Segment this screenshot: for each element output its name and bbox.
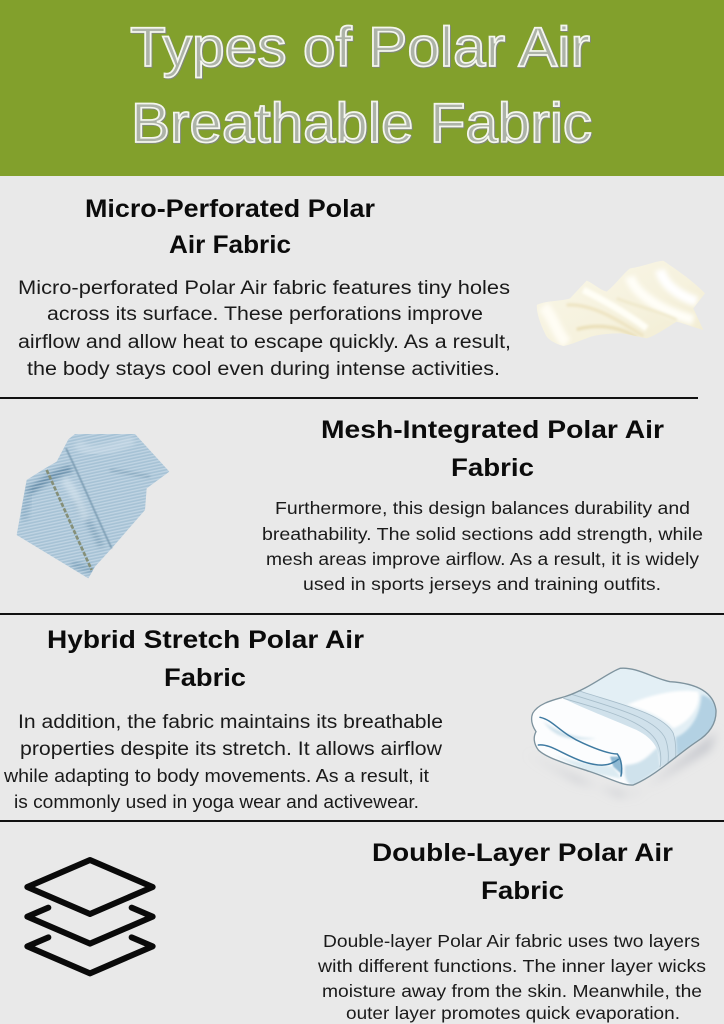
text block: double-layer: outer layer promotes quick evaporation.: [346, 1003, 680, 1023]
text block: hybrid stretch: is commonly used in yoga wear and activewear.: [14, 791, 419, 812]
panel: double-layer fabric: [27, 839, 706, 1023]
text block: hybrid stretch: while adapting to body movements. As a result, it: [3, 765, 429, 786]
text block: hybrid stretch: properties despite its stretch. It allows airflow: [20, 739, 442, 760]
text block: micro-perforated: the body stays cool even during intense activities.: [27, 359, 500, 380]
text block: mesh-integrated: mesh areas improve airflow. As a result, it is widely: [266, 549, 699, 569]
text block: micro-perforated: [18, 278, 511, 380]
header banner: [0, 0, 724, 176]
icon: stacked layers: [27, 860, 153, 973]
text block: mesh-integrated: used in sports jerseys and training outfits.: [303, 574, 661, 594]
heading: micro-perforated: Micro-Perforated Polar: [85, 195, 375, 223]
heading: mesh-integrated: Fabric: [451, 454, 534, 482]
text block: mesh-integrated: Furthermore, this design balances durability and: [275, 498, 690, 518]
divider 1: [0, 397, 698, 399]
heading: hybrid stretch: [47, 626, 364, 692]
icon: denim fabric swatch: [13, 430, 173, 580]
heading: mesh-integrated: [321, 416, 664, 482]
heading: micro-perforated: [85, 195, 375, 259]
text block: micro-perforated: airflow and allow heat to escape quickly. As a result,: [18, 332, 511, 353]
title: Breathable Fabric: [131, 91, 592, 154]
heading: double-layer: Fabric: [481, 877, 564, 905]
text block: micro-perforated: Micro-perforated Polar Air fabric features tiny holes: [18, 278, 510, 299]
text block: hybrid stretch: In addition, the fabric maintains its breathable: [18, 712, 443, 733]
title: Types of Polar Air: [130, 15, 590, 78]
heading: mesh-integrated: Mesh-Integrated Polar Air: [321, 416, 664, 444]
heading: micro-perforated: Air Fabric: [169, 231, 291, 259]
divider 2: [0, 613, 724, 615]
text block: mesh-integrated: [262, 498, 703, 594]
heading: hybrid stretch: Hybrid Stretch Polar Air: [47, 626, 364, 654]
icon: folded towel: [527, 663, 720, 797]
heading: double-layer: Double-Layer Polar Air: [372, 839, 673, 867]
panel: mesh-integrated fabric: [13, 416, 703, 594]
text block: double-layer: moisture away from the skin. Meanwhile, the: [322, 981, 702, 1001]
text block: mesh-integrated: breathability. The solid sections add strength, while: [262, 524, 703, 544]
icon: crumpled cream fabric: [537, 261, 705, 346]
text block: hybrid stretch: [3, 712, 443, 812]
divider 3: [0, 820, 724, 822]
heading: hybrid stretch: Fabric: [164, 664, 246, 692]
heading: double-layer: [372, 839, 673, 905]
panel: micro-perforated fabric: [18, 195, 710, 380]
text block: micro-perforated: across its surface. These perforations improve: [47, 304, 483, 325]
text block: double-layer: Double-layer Polar Air fabric uses two layers: [323, 931, 700, 951]
text block: double-layer: [317, 931, 706, 1023]
title: [130, 15, 592, 154]
panel: hybrid stretch fabric: [3, 626, 720, 812]
text block: double-layer: with different functions. The inner layer wicks: [317, 956, 706, 976]
